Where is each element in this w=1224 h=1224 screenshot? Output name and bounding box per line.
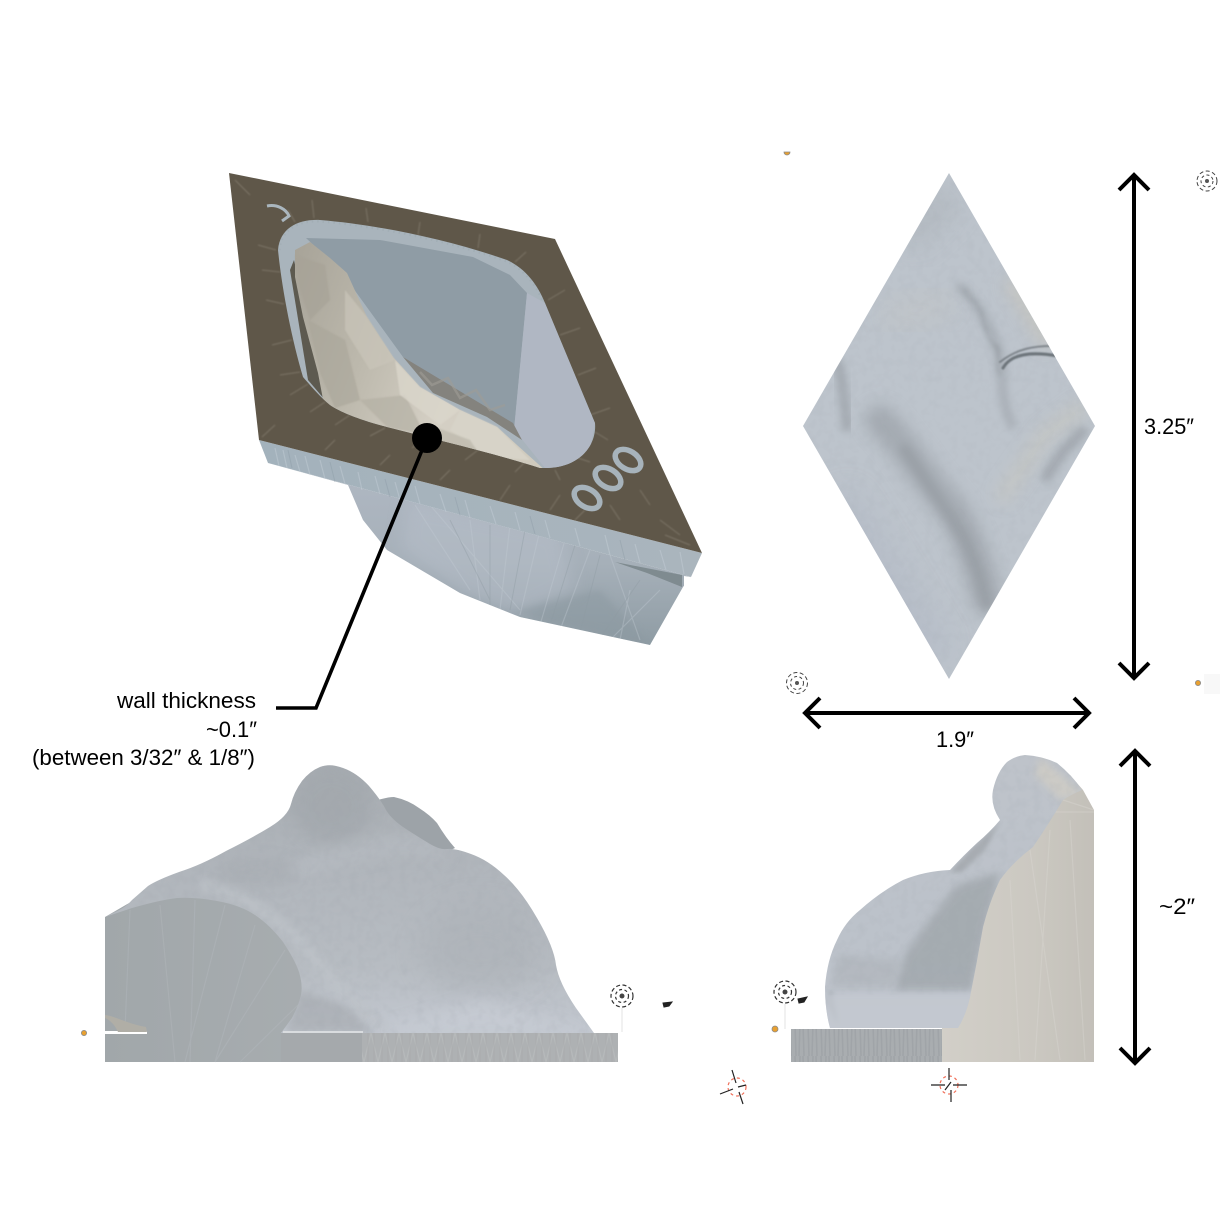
3D view: underside of shell from angle bbox=[229, 173, 702, 645]
top view: diamond shell bbox=[803, 173, 1095, 679]
viewport gizmo: light target side view bbox=[774, 981, 796, 1029]
viewport gizmo: light target top right bbox=[1197, 171, 1217, 191]
blob surface bbox=[825, 755, 1082, 1028]
curved surface bbox=[105, 765, 594, 1033]
camera icons bbox=[663, 997, 807, 1007]
wall thickness label bbox=[32, 688, 257, 770]
rim streak texture bbox=[278, 220, 595, 423]
3D cursor: angled bbox=[720, 1070, 746, 1104]
wall thickness label: (between 3/32″ & 1/8″) bbox=[32, 745, 255, 770]
underside body bbox=[268, 463, 691, 645]
surface bump texture bbox=[803, 173, 1095, 679]
dimension arrow: 2 inch height bbox=[1120, 751, 1150, 1063]
mounting rings bbox=[267, 206, 645, 513]
plate thickness face bbox=[259, 440, 702, 577]
soft tonal patches bbox=[846, 202, 1044, 654]
left dark gap bbox=[290, 260, 325, 400]
inner back wall bbox=[306, 238, 527, 430]
brown top plate bbox=[229, 173, 702, 553]
viewport gizmo: light target centre bbox=[786, 672, 808, 694]
base strip left bbox=[281, 1033, 362, 1062]
dark faceted far wall bbox=[403, 357, 522, 440]
wall fan streaks bbox=[125, 900, 298, 1062]
light fan marks around hole bbox=[235, 180, 690, 545]
callout: wall thickness leader line bbox=[276, 423, 442, 708]
label 3.25 inch: 3.25″ bbox=[1144, 414, 1194, 439]
wall thickness label: ~0.1″ bbox=[206, 717, 257, 742]
right side notch bbox=[615, 562, 691, 590]
blob shading bbox=[825, 755, 1085, 1034]
hole in plate bbox=[278, 220, 595, 472]
base strip bbox=[791, 1029, 942, 1062]
3D cursor: straight bbox=[931, 1068, 967, 1102]
surface shading bbox=[238, 766, 524, 1033]
front view: long side profile bbox=[105, 763, 618, 1062]
viewport gizmo: light target front view bbox=[611, 985, 633, 1032]
dimension arrow: 1.9 inch width bbox=[805, 698, 1089, 728]
beige inner surface bbox=[295, 242, 547, 472]
faint light patch at edge bbox=[1204, 674, 1220, 694]
flat wall bbox=[105, 885, 362, 1062]
inner right wall bbox=[514, 293, 595, 468]
beige wall bbox=[942, 775, 1094, 1062]
left notch bbox=[105, 1015, 363, 1034]
label 2 inch: ~2″ bbox=[1159, 894, 1195, 919]
base strip right bbox=[362, 1033, 618, 1062]
wall streaks bbox=[1010, 800, 1094, 1060]
dimension arrow: 3.25 inch height bbox=[1119, 175, 1149, 678]
wall thickness label: wall thickness bbox=[116, 688, 256, 713]
orange origin dots bbox=[81, 152, 1201, 1036]
label 1.9 inch: 1.9″ bbox=[936, 727, 974, 752]
back ridge bbox=[378, 797, 455, 855]
dark creases bbox=[838, 287, 1082, 605]
side view: short side profile bbox=[791, 755, 1094, 1062]
